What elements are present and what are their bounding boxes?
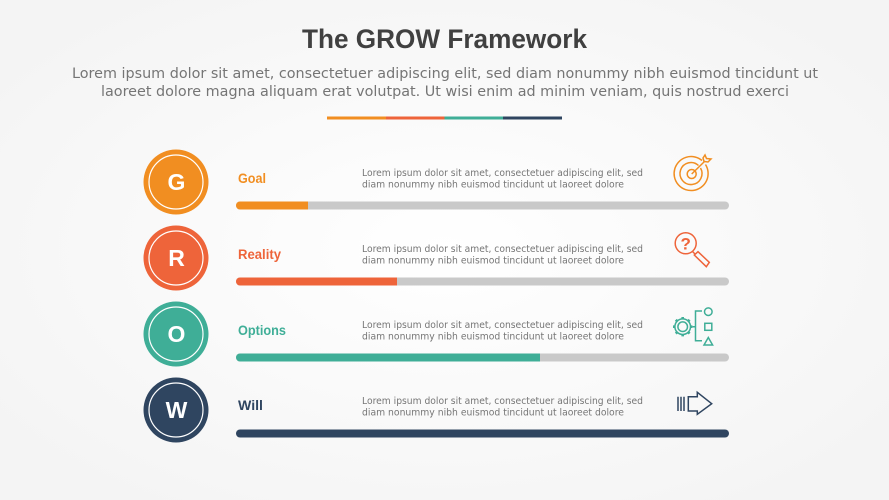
badge: R (144, 226, 208, 290)
progress bar: Options (236, 354, 729, 362)
label: Will: Will (238, 398, 263, 413)
description: Options (362, 320, 643, 342)
icon: magnifier with question mark (675, 233, 709, 267)
description: Options: Lorem ipsum dolor sit amet, consectetuer adipiscing elit, sed (362, 320, 643, 331)
icon: magnifier with question mark: ? (681, 234, 691, 254)
description: Reality (362, 244, 643, 266)
progress bar: Reality (236, 278, 729, 286)
row: Reality (144, 226, 729, 290)
badge: G: G (168, 169, 185, 195)
badge: O (144, 302, 208, 366)
title: The GROW Framework (302, 24, 588, 54)
badge: R: R (168, 245, 185, 271)
description: Goal: diam nonummy nibh euismod tincidunt ut laoreet dolore (362, 180, 624, 190)
description: Will (362, 396, 643, 418)
subtitle text (72, 65, 818, 100)
icon: target (674, 155, 711, 191)
row: Will (144, 378, 729, 442)
description: Goal: Lorem ipsum dolor sit amet, consectetuer adipiscing elit, sed (362, 168, 643, 179)
description: Reality: Lorem ipsum dolor sit amet, consectetuer adipiscing elit, sed (362, 244, 643, 255)
description: Options: diam nonummy nibh euismod tincidunt ut laoreet dolore (362, 332, 624, 342)
label: Reality: Reality (238, 247, 281, 262)
badge: W (144, 378, 208, 442)
description: Goal (362, 168, 643, 190)
badge: W: W (166, 397, 188, 423)
progress bar: Goal (236, 202, 729, 210)
icon: gear with shapes (673, 308, 713, 345)
description: Will: diam nonummy nibh euismod tincidunt ut laoreet dolore (362, 408, 624, 418)
row: Options (144, 302, 729, 366)
colored divider (327, 116, 562, 120)
icon: arrow (678, 392, 712, 414)
description: Will: Lorem ipsum dolor sit amet, consectetuer adipiscing elit, sed (362, 396, 643, 407)
description: Reality: diam nonummy nibh euismod tincidunt ut laoreet dolore (362, 256, 624, 266)
label: Options: Options (238, 323, 286, 338)
row: Goal (144, 150, 729, 214)
badge: G (144, 150, 208, 214)
badge: O: O (168, 321, 185, 347)
progress bar: Will (236, 430, 729, 438)
label: Goal: Goal (238, 171, 266, 186)
subtitle text: laoreet dolore magna aliquam erat volutpat. Ut wisi enim ad minim veniam, quis nostrud exerci (101, 83, 789, 100)
subtitle text: Lorem ipsum dolor sit amet, consectetuer adipiscing elit, sed diam nonummy nibh euismod tincidunt ut (72, 65, 818, 82)
